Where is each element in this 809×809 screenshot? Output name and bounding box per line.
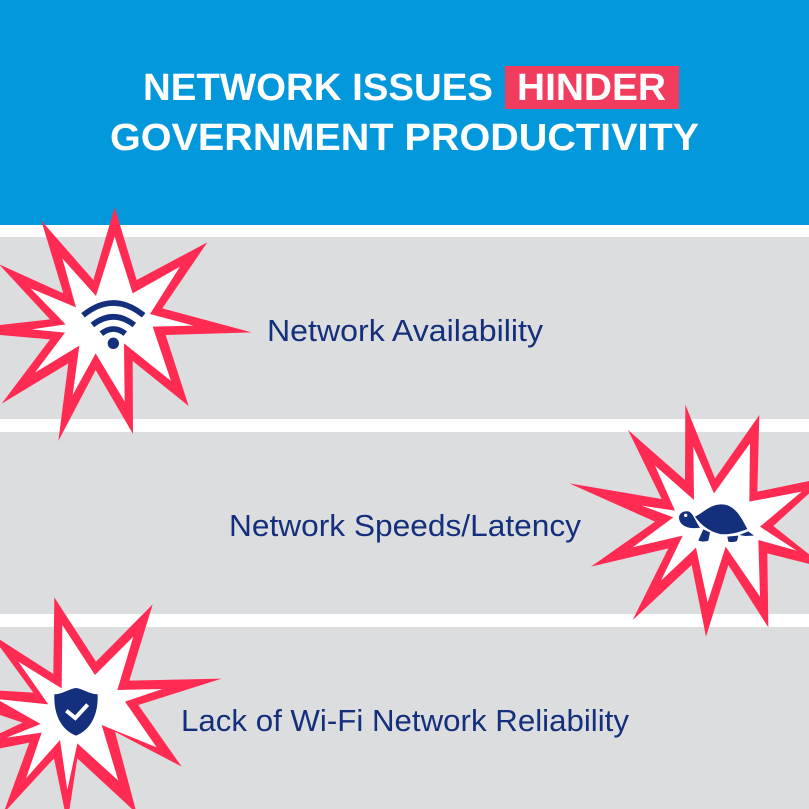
label: network availability: Network Availability: [267, 313, 544, 348]
icon: wifi: [83, 303, 144, 349]
label: wi-fi reliability: Lack of Wi-Fi Network Reliability: [181, 703, 629, 738]
panel: wi-fi reliability band: [0, 627, 809, 809]
header band: [0, 0, 809, 225]
panel: network speeds band: [0, 432, 809, 614]
title: [110, 66, 699, 159]
icon: turtle: [679, 504, 754, 542]
title line one: NETWORK ISSUES: [143, 67, 493, 109]
starburst: wifi: [0, 207, 252, 441]
turtle eye: [684, 514, 687, 517]
title line two: GOVERNMENT PRODUCTIVITY: [110, 117, 699, 159]
icon: shield: [54, 688, 98, 736]
starburst: turtle: [569, 405, 809, 637]
label: network speeds: Network Speeds/Latency: [229, 508, 582, 543]
highlight: hinder: HINDER: [517, 67, 666, 109]
panel: network availability band: [0, 237, 809, 419]
starburst: shield: [0, 597, 222, 809]
